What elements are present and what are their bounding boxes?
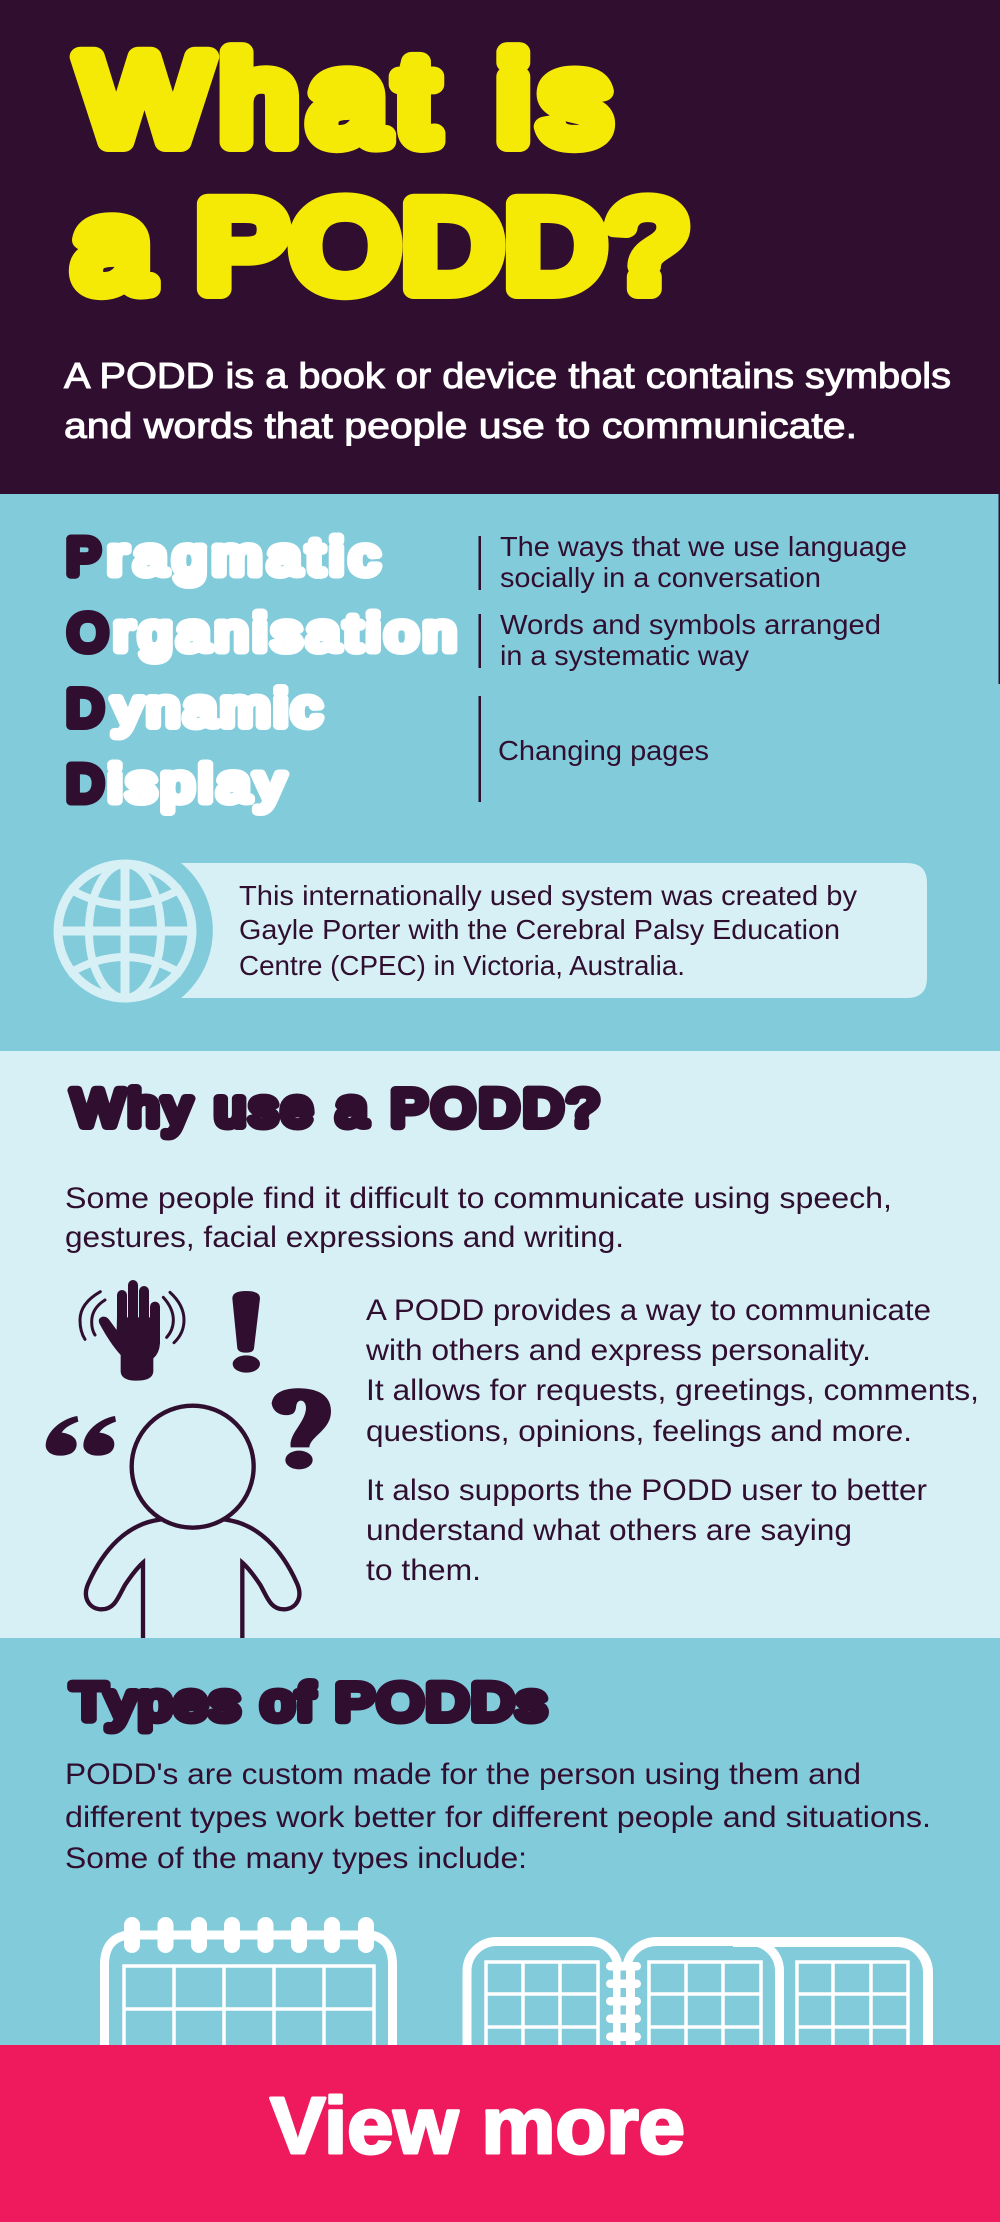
acronym row: Organisation: O [68, 604, 108, 661]
heading: why use a PODD: Why use a PODD? [72, 1080, 598, 1137]
acronym row: Pragmatic: socially in a conversation [500, 562, 821, 593]
title [74, 30, 684, 316]
explanation text: understand what others are saying [366, 1514, 852, 1547]
explanation text: questions, opinions, feelings and more. [366, 1415, 912, 1448]
icon: calendar style PODD [104, 1917, 392, 2046]
types paragraph: Some of the many types include: [65, 1842, 527, 1875]
acronym row: Organisation: Words and symbols arranged [500, 609, 881, 640]
panel: why use a PODD [0, 1051, 1000, 1639]
types paragraph: PODD's are custom made for the person using them and [65, 1758, 861, 1791]
acronym row: Organisation [68, 604, 881, 671]
illustration: person communicating [46, 1280, 331, 1639]
acronym row: Pragmatic: P [66, 528, 101, 585]
icon: quotation marks [46, 1416, 116, 1456]
intro paragraph: gestures, facial expressions and writing. [65, 1221, 624, 1254]
intro text: A PODD is a book or device that contains symbols [64, 355, 951, 396]
intro paragraph: Some people find it difficult to communicate using speech, [65, 1182, 892, 1215]
button label: view more: View more [270, 2081, 685, 2170]
panel: types of PODDs [0, 1638, 1000, 2046]
callout: origin of system [180, 863, 927, 998]
types paragraph [65, 1758, 931, 1875]
callout: origin of system: Gayle Porter with the Cerebral Palsy Education [239, 914, 840, 945]
intro paragraph [65, 1182, 892, 1254]
acronym row: Organisation: in a systematic way [500, 640, 749, 671]
acronym row: Dynamic: ynamic [113, 679, 321, 737]
acronym row: Pragmatic: ragmatic [108, 528, 379, 585]
callout: origin of system: Centre (CPEC) in Victoria, Australia. [239, 950, 685, 981]
explanation text: It allows for requests, greetings, comments, [366, 1374, 979, 1407]
explanation text: with others and express personality. [365, 1334, 871, 1367]
title: a PODD? [74, 177, 685, 316]
acronym row: Organisation: rganisation [114, 604, 456, 661]
acronym row: Pragmatic [66, 528, 907, 593]
intro text [64, 355, 951, 446]
intro text: and words that people use to communicate. [64, 405, 857, 446]
icon: globe [57, 863, 193, 999]
title: What is [80, 30, 609, 169]
icon: person outline [86, 1406, 299, 1639]
types paragraph: different types work better for different people and situations. [65, 1801, 931, 1834]
acronym row: Pragmatic: The ways that we use language [500, 531, 907, 562]
explanation text: It also supports the PODD user to better [366, 1474, 927, 1507]
description: Dynamic Display: Changing pages [498, 735, 709, 766]
explanation text: to them. [366, 1554, 481, 1587]
acronym row: Display: D [66, 755, 103, 812]
heading: types of PODDs: Types of PODDs [71, 1673, 546, 1731]
icon: question mark [272, 1388, 331, 1469]
icon: waving hand [80, 1280, 184, 1381]
explanation text: A PODD provides a way to communicate [366, 1294, 931, 1327]
explanation text [365, 1294, 979, 1587]
panel: header [0, 0, 1000, 494]
panel: view more banner [0, 2045, 1000, 2222]
callout: origin of system: This internationally used system was created by [239, 880, 857, 911]
panel: acronym [0, 494, 1000, 1051]
acronym row: Dynamic: D [66, 680, 103, 736]
acronym row: Display: isplay [108, 755, 285, 812]
icon: spiral book PODD [467, 1941, 928, 2046]
icon: exclamation mark [232, 1291, 260, 1373]
